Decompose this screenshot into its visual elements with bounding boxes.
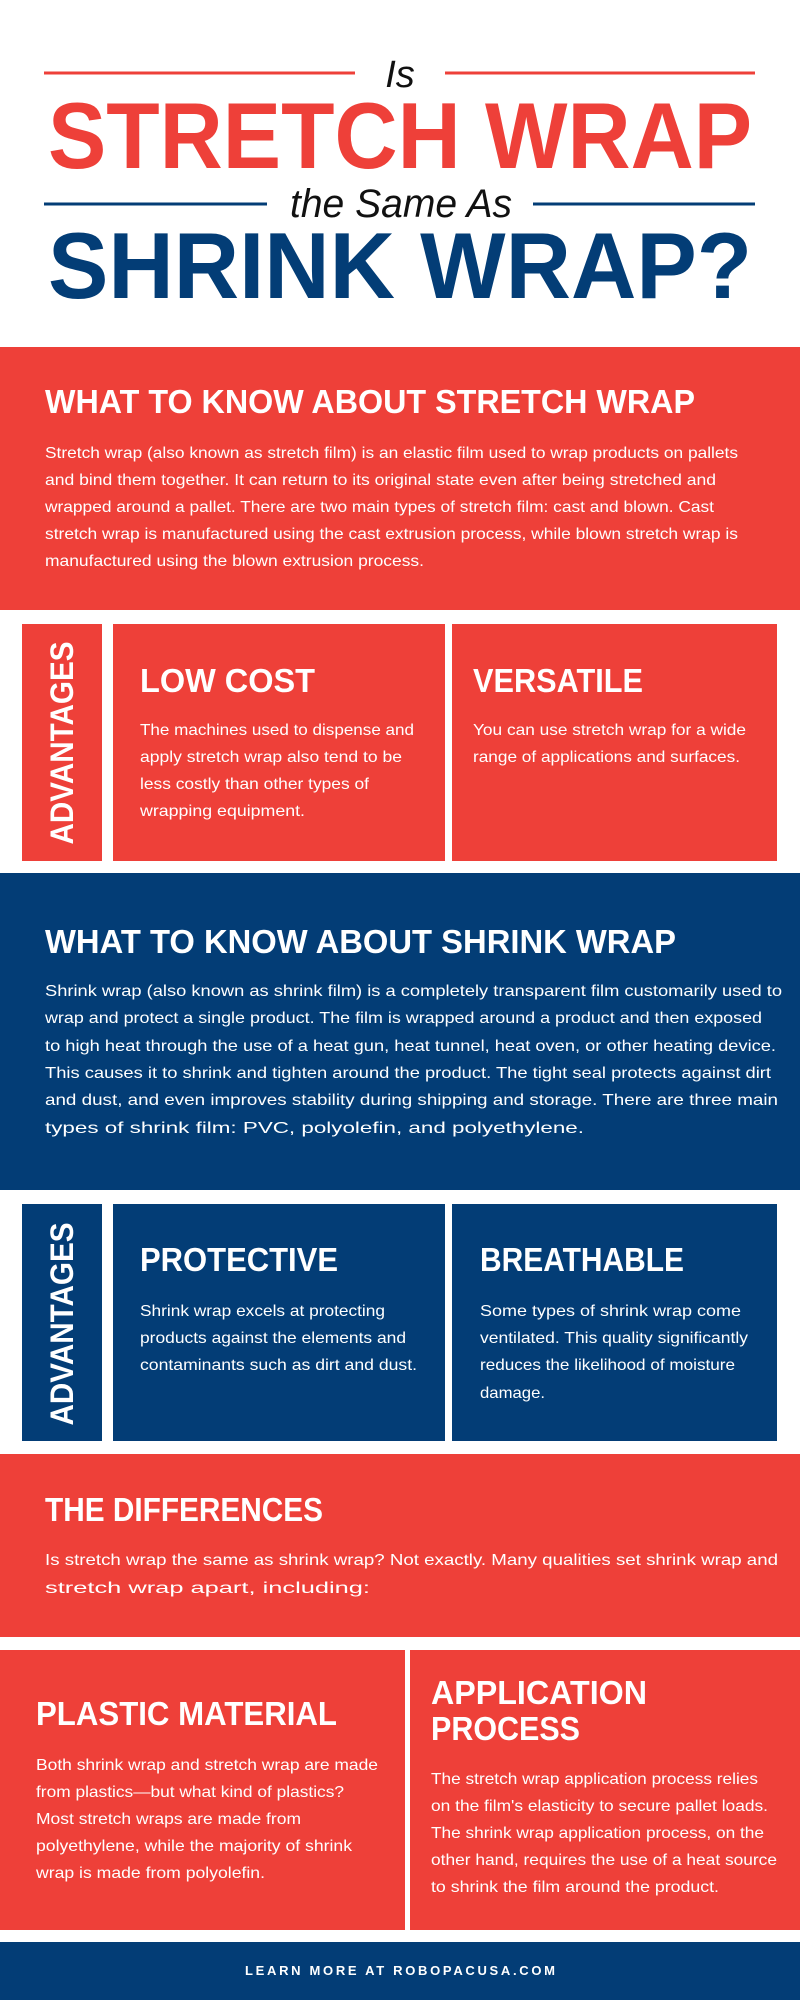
panel: differences: THE DIFFERENCES [45,1491,323,1528]
title [44,54,755,318]
card: application process [410,1650,800,1930]
panel: stretch wrap: Stretch wrap (also known as stretch film) is an elastic film used to wrap products on pallets [45,445,738,462]
card: plastic material: wrap is made from polyolefin. [35,1865,265,1882]
card: application process: to shrink the film around the product. [431,1879,719,1896]
card: low cost [113,624,445,861]
card: versatile [452,624,777,861]
card: application process: on the film's elasticity to secure pallet loads. [431,1798,768,1815]
card: breathable [452,1204,777,1441]
card: low cost: apply stretch wrap also tend to be [140,749,402,766]
card: plastic material: polyethylene, while the majority of shrink [36,1838,353,1855]
panel: shrink wrap: wrap and protect a single product. The film is wrapped around a product and then exposed [44,1010,762,1027]
panel: stretch wrap: and bind them together. It can return to its original state even after being stretched and [45,472,716,489]
title: the Same As [290,182,512,226]
panel: shrink wrap: and dust, and even improves stability during shipping and storage. There are three main [45,1092,778,1109]
panel: shrink wrap: to high heat through the use of a heat gun, heat tunnel, heat oven, or other heating device. [45,1038,776,1055]
card: low cost: less costly than other types of [140,776,370,793]
card: versatile: VERSATILE [473,662,643,699]
panel: stretch wrap: wrapped around a pallet. There are two main types of stretch film: cast and blown. Cast [44,499,715,516]
card: breathable: Some types of shrink wrap come [480,1303,741,1320]
card: plastic material [0,1650,405,1930]
card: application process: The stretch wrap application process relies [431,1771,758,1788]
card: protective [113,1204,445,1441]
label: advantages [22,1204,102,1441]
card: protective: products against the elements and [140,1330,406,1347]
footer [0,1942,800,2000]
card: versatile: You can use stretch wrap for a wide [473,722,746,739]
panel: shrink advantages [22,1204,777,1441]
card: application process: APPLICATION [431,1674,647,1711]
card: protective: PROTECTIVE [140,1241,338,1278]
card: versatile: range of applications and surfaces. [473,749,740,766]
label: advantages: ADVANTAGES [44,642,80,844]
card: breathable: ventilated. This quality significantly [480,1330,748,1347]
card: low cost: wrapping equipment. [139,803,305,820]
panel: stretch wrap: WHAT TO KNOW ABOUT STRETCH WRAP [45,383,695,420]
panel: shrink wrap [0,873,800,1190]
panel: shrink wrap: types of shrink film: PVC, polyolefin, and polyethylene. [45,1120,584,1137]
footer: LEARN MORE AT ROBOPACUSA.COM [245,1963,555,1978]
panel: shrink wrap: WHAT TO KNOW ABOUT SHRINK WRAP [45,923,676,960]
panel: differences [0,1454,800,1637]
title: Is [385,54,415,96]
card: plastic material: PLASTIC MATERIAL [36,1695,337,1732]
card: application process: PROCESS [431,1710,580,1747]
panel: differences: stretch wrap apart, including: [45,1580,370,1597]
card: protective: Shrink wrap excels at protecting [140,1303,385,1320]
panel: stretch wrap: manufactured using the blown extrusion process. [45,553,424,570]
panel: shrink wrap: This causes it to shrink and tighten around the product. The tight seal protects against dirt [45,1065,772,1082]
panel: shrink wrap: Shrink wrap (also known as shrink film) is a completely transparent film customarily used to [45,983,782,1000]
title: SHRINK WRAP? [48,213,752,318]
card: low cost: LOW COST [140,662,315,699]
card: breathable: BREATHABLE [480,1241,684,1278]
card: breathable: reduces the likelihood of moisture [480,1357,735,1374]
card: application process: other hand, requires the use of a heat source [431,1852,777,1869]
panel: stretch wrap [0,347,800,610]
card: plastic material: Both shrink wrap and stretch wrap are made [36,1757,378,1774]
panel: stretch wrap: stretch wrap is manufactured using the cast extrusion process, while blown stretch wrap is [45,526,738,543]
panel: stretch advantages [22,624,777,861]
card: protective: contaminants such as dirt and dust. [140,1357,417,1374]
card: breathable: damage. [480,1385,545,1402]
card: low cost: The machines used to dispense and [140,722,414,739]
card: application process: The shrink wrap application process, on the [431,1825,764,1842]
label: advantages: ADVANTAGES [44,1222,80,1426]
title: STRETCH WRAP [48,83,752,188]
card: plastic material: Most stretch wraps are made from [36,1811,301,1828]
card: plastic material: from plastics—but what kind of plastics? [36,1784,344,1801]
label: advantages [22,624,102,861]
panel: differences: Is stretch wrap the same as shrink wrap? Not exactly. Many qualities set shrink wrap and [45,1552,778,1569]
